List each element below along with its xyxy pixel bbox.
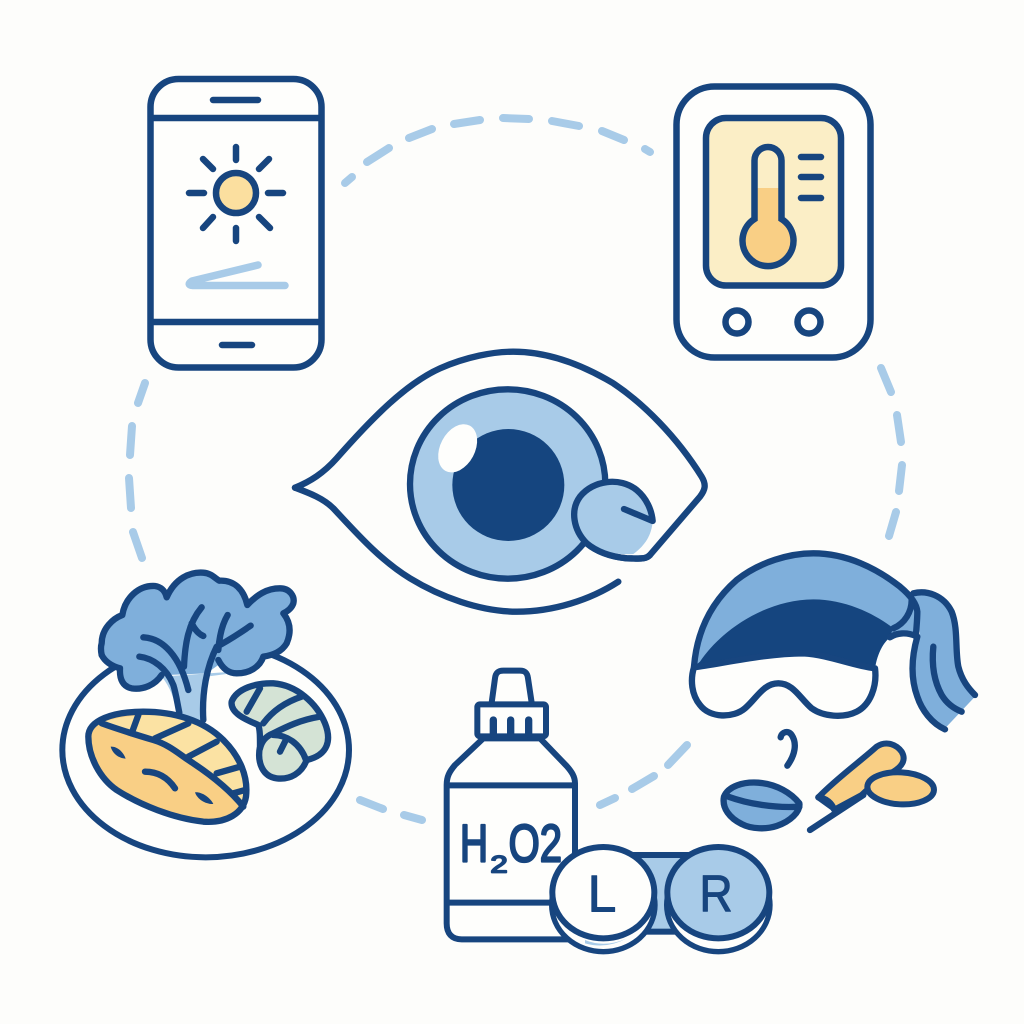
H2O2 label: H: [460, 814, 488, 873]
device screen: [706, 118, 841, 286]
mask lenses: [692, 653, 875, 716]
H2O2 label: [460, 814, 562, 879]
bottle tip: [492, 671, 532, 703]
left well: [552, 847, 654, 938]
light blue sketch line on phone screen: [189, 265, 285, 286]
icon: sleep eye mask and contact accessories: [692, 553, 975, 830]
pupil: [452, 429, 564, 541]
letter R: R: [699, 865, 733, 923]
ribbon tail: [912, 592, 975, 729]
device buttons: [726, 310, 820, 334]
right well: [667, 847, 769, 938]
iris: [410, 389, 605, 579]
shrimp: [232, 683, 328, 779]
icon: smartphone with sun: [150, 79, 322, 368]
salmon fillet: [88, 712, 246, 822]
eye highlight: [430, 418, 485, 479]
tweezers applicator: [810, 744, 935, 830]
temperature ticks: [801, 157, 821, 198]
case base: [552, 858, 770, 952]
contact lens case: [552, 847, 770, 952]
icon: sun: [189, 147, 283, 241]
eye outline: [295, 352, 705, 612]
contact lens on eye: [574, 482, 653, 559]
nose curl: [781, 732, 795, 766]
letter L: L: [588, 865, 616, 923]
H2O2 label: 2: [490, 852, 508, 879]
headband: [694, 553, 917, 668]
case bridge: [630, 855, 690, 932]
icon: thermometer device: [676, 86, 870, 358]
bottle label lines: [447, 785, 575, 903]
almond shape: [867, 771, 935, 806]
bottle body: [447, 738, 575, 939]
dashed ring connecting the icons: [129, 118, 902, 820]
icon: hydrogen peroxide bottle: [447, 671, 770, 952]
contact lens: [724, 783, 799, 828]
icon: plate of healthy food: [62, 573, 349, 857]
thermometer: [742, 147, 794, 266]
icon: central eye with contact lens: [295, 352, 705, 612]
H2O2 label: O2: [509, 814, 562, 873]
bottle cap: [477, 704, 546, 736]
broccoli: [101, 573, 294, 723]
plate: [62, 643, 349, 857]
